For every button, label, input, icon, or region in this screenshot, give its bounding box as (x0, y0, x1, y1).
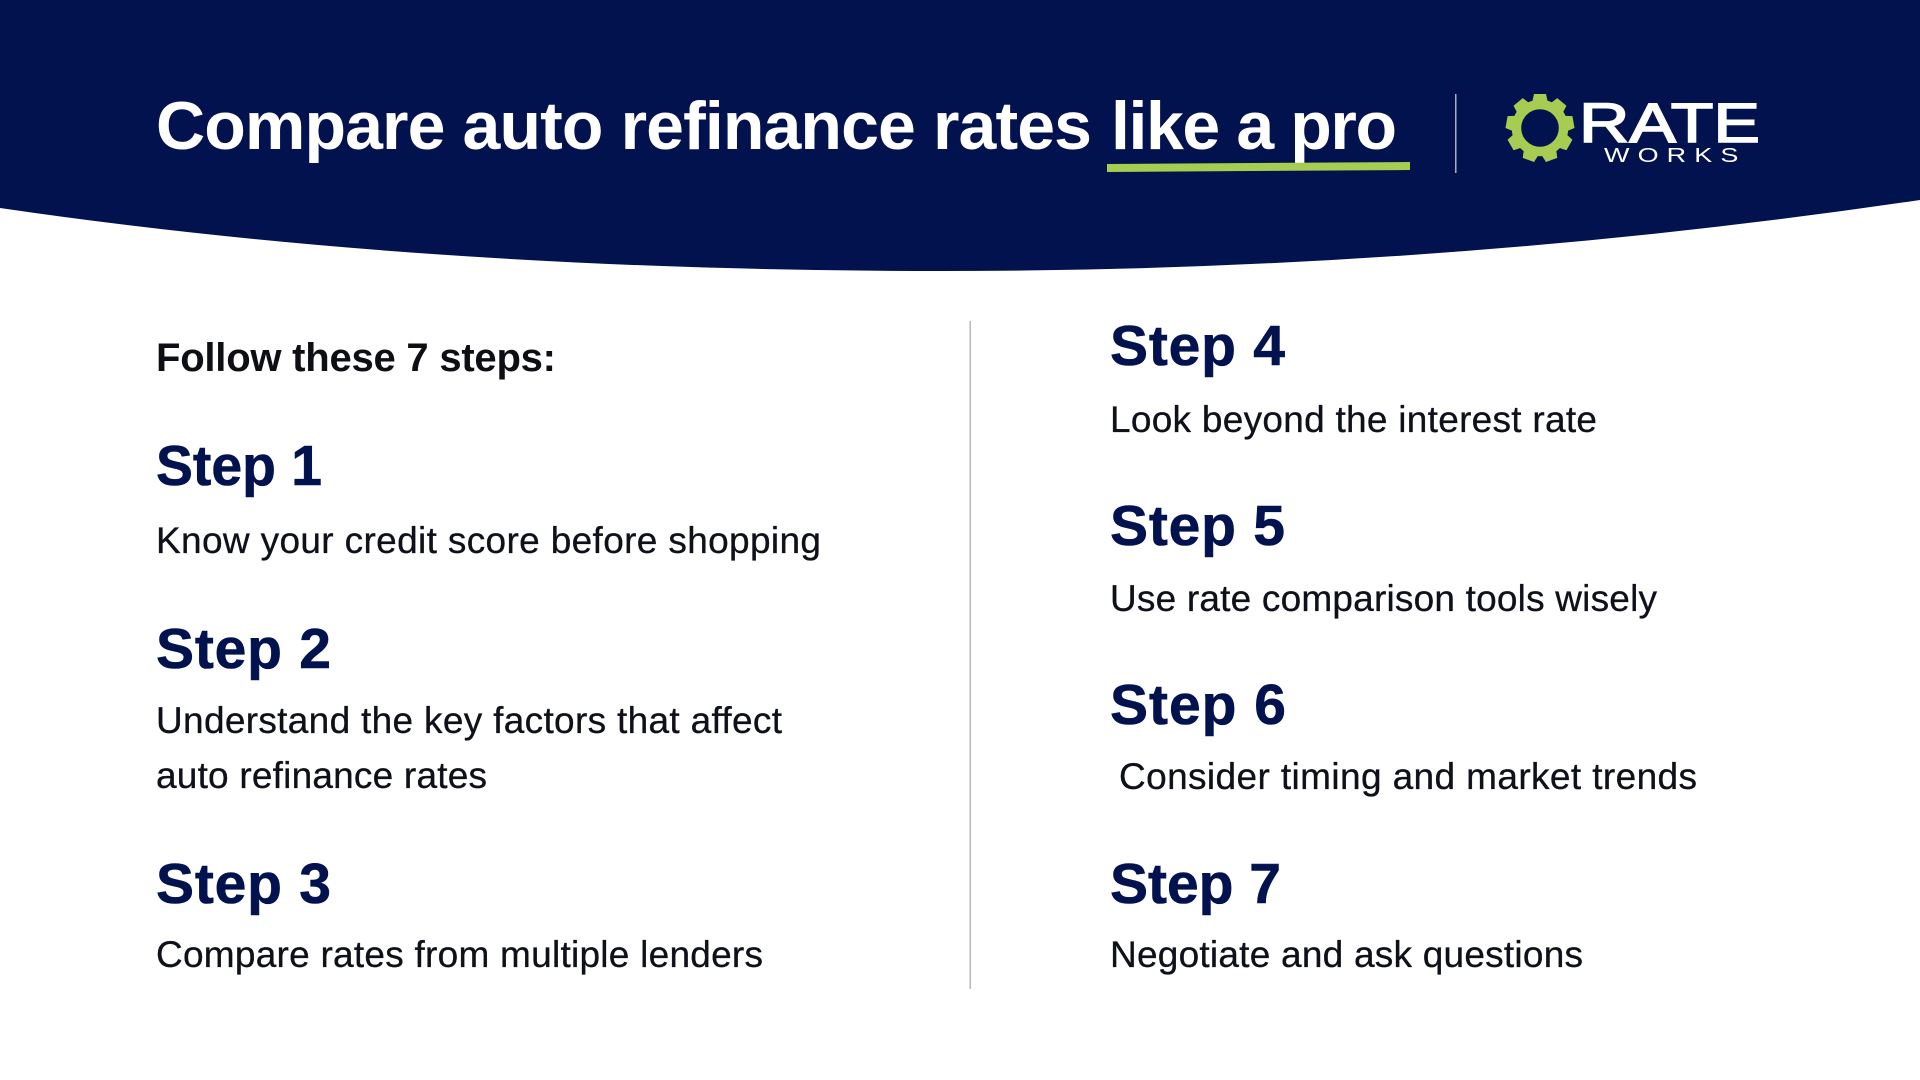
step 1 (156, 434, 821, 561)
step 7: Step 7 (1110, 852, 1281, 916)
step 5: Step 5 (1110, 494, 1285, 558)
title: like a pro (1111, 88, 1397, 164)
title underline (1107, 162, 1410, 172)
step 7: Negotiate and ask questions (1110, 934, 1583, 975)
step 2: Understand the key factors that affect (156, 700, 783, 741)
step 6 (1110, 673, 1697, 797)
intro heading: Follow these 7 steps: (156, 336, 556, 380)
logo: Rate Works (1505, 91, 1760, 167)
step 5: Use rate comparison tools wisely (1110, 578, 1658, 619)
step 2 (156, 617, 783, 796)
column divider (970, 321, 971, 989)
step 4 (1110, 314, 1597, 440)
header divider (1455, 94, 1456, 173)
logo subtitle: WORKS (1604, 144, 1746, 167)
step 3: Compare rates from multiple lenders (156, 934, 763, 975)
step 2: auto refinance rates (156, 755, 487, 796)
step 1: Know your credit score before shopping (156, 520, 821, 561)
step 6: Consider timing and market trends (1119, 756, 1697, 797)
step 4: Step 4 (1110, 314, 1285, 378)
icon: gear (1505, 94, 1575, 163)
step 5 (1110, 494, 1658, 619)
step 3: Step 3 (156, 852, 331, 916)
step 4: Look beyond the interest rate (1110, 399, 1597, 440)
step 2: Step 2 (156, 617, 331, 681)
step 7 (1110, 852, 1583, 975)
logo wordmark: RATE (1579, 91, 1760, 154)
header banner (0, 0, 1920, 271)
step 3 (156, 852, 763, 975)
step 6: Step 6 (1110, 673, 1286, 737)
step 1: Step 1 (156, 434, 322, 498)
title: Compare auto refinance rates (156, 88, 1092, 164)
